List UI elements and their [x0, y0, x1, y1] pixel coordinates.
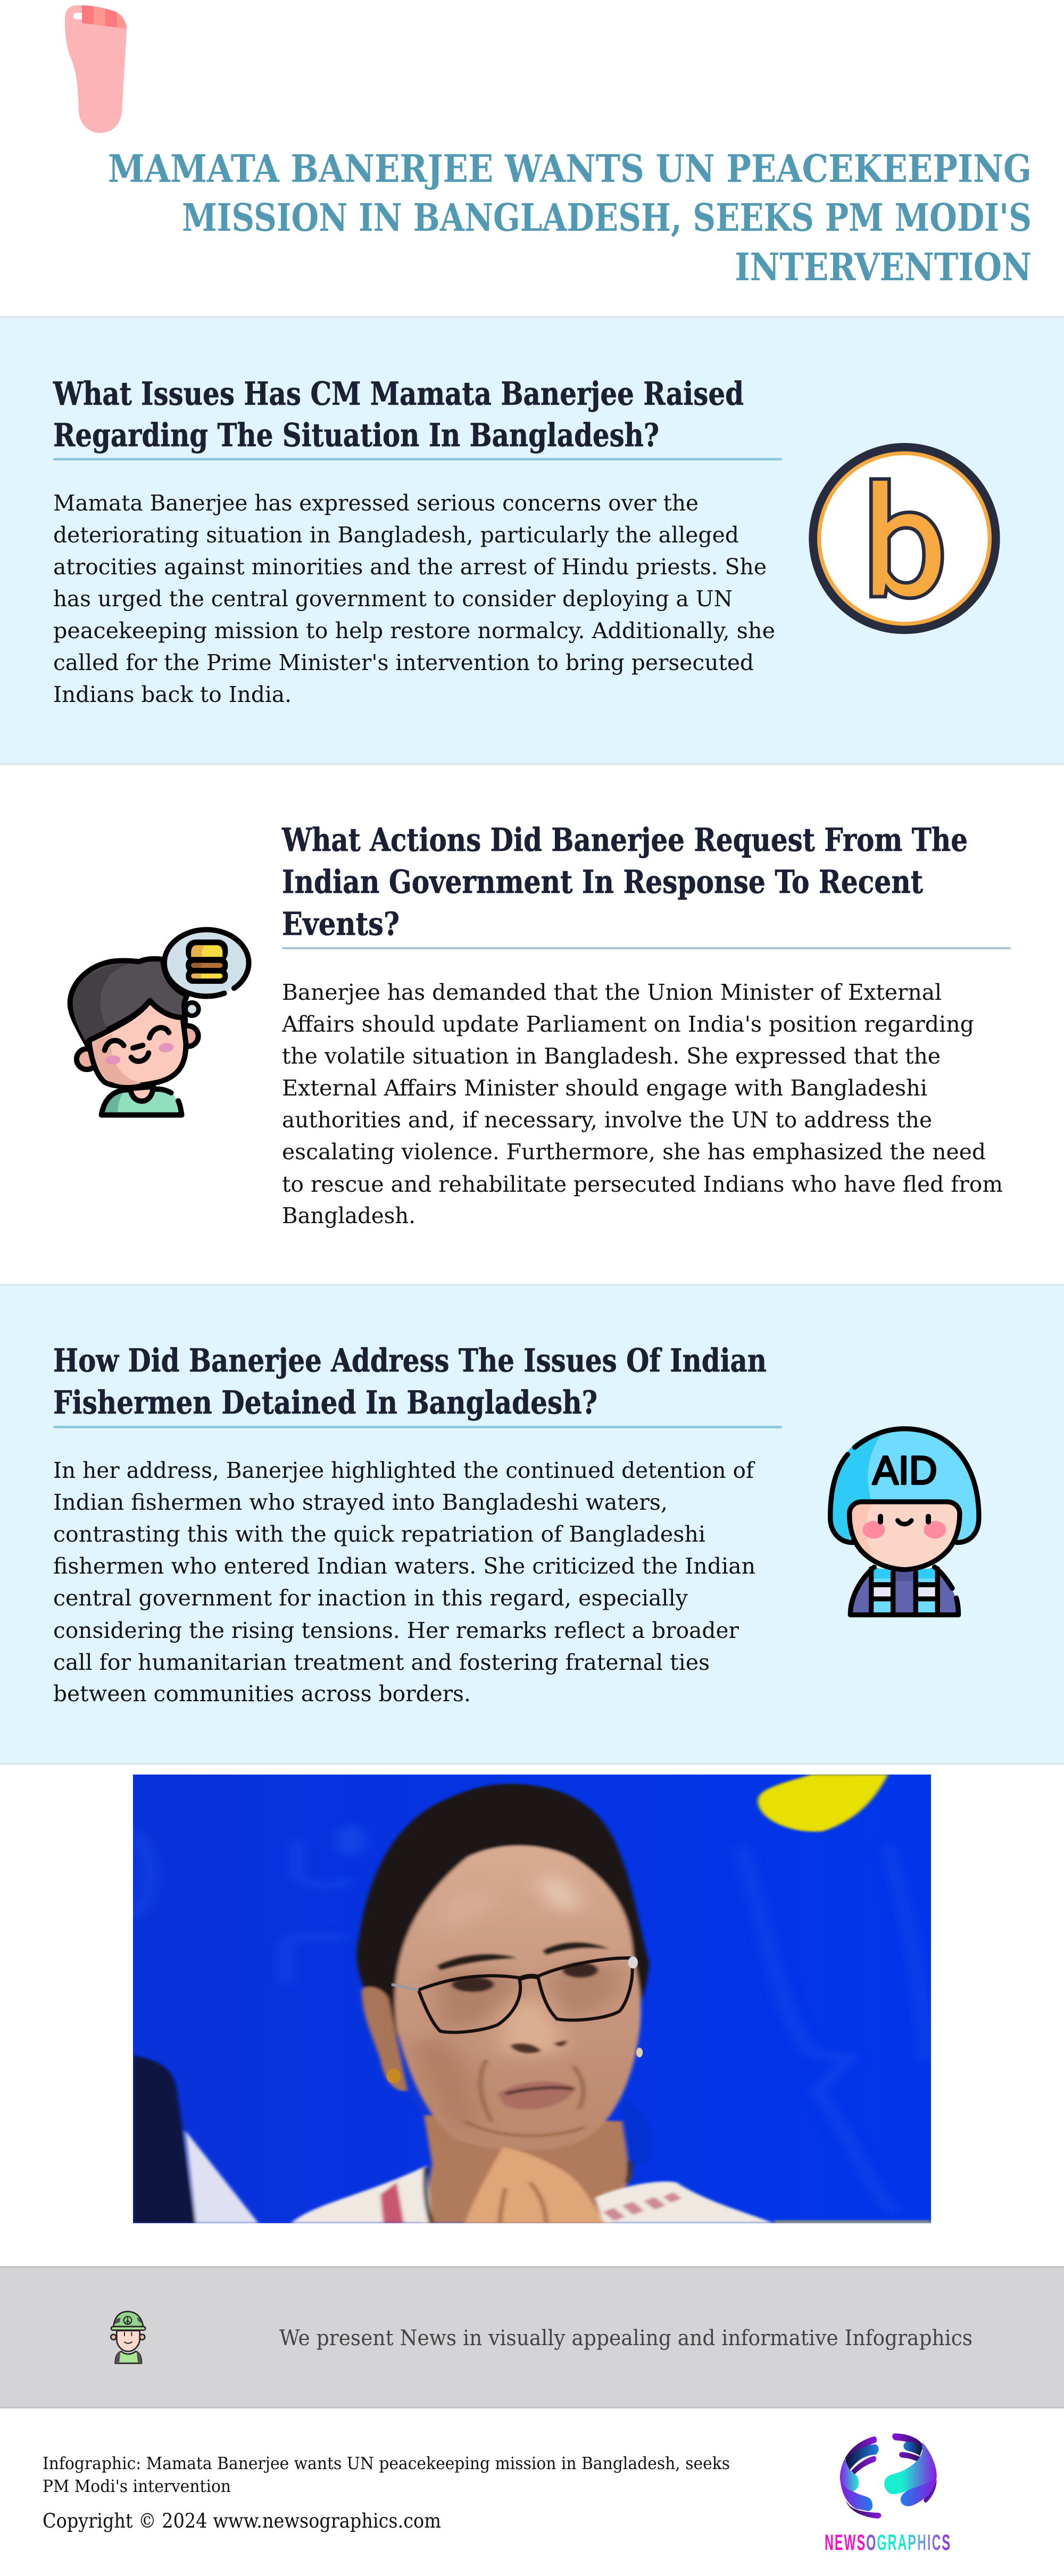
body text: issues raised: Mamata Banerjee has expressed serious concerns over the: [53, 490, 699, 516]
heading: issues raised: Regarding The Situation In Bangladesh?: [53, 417, 659, 454]
body text: fishermen detained: between communities across borders.: [53, 1681, 471, 1707]
heading: issues raised: [53, 375, 744, 454]
panel: actions requested: [70, 822, 1011, 1228]
icon: soldier with peace helmet: [111, 2312, 145, 2363]
heading: actions requested: Indian Government In Response To Recent: [282, 864, 923, 901]
panel: fishermen detained: [0, 1285, 1064, 1764]
heading: fishermen detained: How Did Banerjee Address The Issues Of Indian: [53, 1342, 767, 1379]
panel: tagline band: [0, 2267, 1064, 2407]
body text: actions requested: Affairs should update Parliament on India's position regarding: [281, 1011, 974, 1037]
body text: issues raised: called for the Prime Minister's intervention to bring persecuted: [53, 650, 754, 675]
heading: fishermen detained: Fishermen Detained In Bangladesh?: [53, 1384, 597, 1421]
icon: foot: [65, 0, 128, 133]
heading: issues raised: What Issues Has CM Mamata Banerjee Raised: [53, 375, 744, 413]
heading: fishermen detained: [53, 1342, 767, 1421]
body text: issues raised: atrocities against minorities and the arrest of Hindu priests. She: [53, 554, 767, 580]
body text: fishermen detained: call for humanitarian treatment and fostering fraternal ties: [53, 1650, 710, 1675]
heading: actions requested: [281, 822, 968, 943]
icon: letter b badge: [809, 443, 1000, 634]
body text: issues raised: Indians back to India.: [53, 682, 292, 707]
body text: actions requested: Bangladesh.: [282, 1203, 415, 1228]
body text: actions requested: escalating violence. Furthermore, she has emphasized the need: [282, 1139, 986, 1165]
body text: actions requested: authorities and, if necessary, involve the UN to address the: [282, 1107, 932, 1133]
credit text: [43, 2453, 730, 2532]
body text: fishermen detained: considering the rising tensions. Her remarks reflect a broader: [53, 1618, 739, 1643]
logo mark: [840, 2433, 937, 2519]
body text: actions requested: the volatile situation in Bangladesh. She expressed that the: [282, 1043, 941, 1069]
credit text: Infographic: Mamata Banerjee wants UN peacekeeping mission in Bangladesh, seeks: [43, 2453, 730, 2473]
body text: actions requested: [281, 980, 1003, 1228]
title: [108, 146, 1032, 289]
logo wordmark: NEWSOGRAPHICS: [825, 2530, 950, 2555]
body text: issues raised: has urged the central government to consider deploying a UN: [53, 586, 733, 612]
body text: fishermen detained: central government for inaction in this regard, especially: [53, 1585, 688, 1611]
heading: actions requested: Events?: [282, 906, 400, 943]
body text: fishermen detained: Indian fishermen who strayed into Bangladeshi waters,: [53, 1490, 668, 1515]
panel: issues raised: [0, 317, 1064, 764]
body text: fishermen detained: fishermen who entered Indian waters. She criticized the Indian: [53, 1553, 755, 1579]
credit text: Copyright © 2024 www.newsographics.com: [43, 2510, 441, 2532]
body text: issues raised: peacekeeping mission to help restore normalcy. Additionally, she: [53, 618, 775, 643]
body text: issues raised: deteriorating situation in Bangladesh, particularly the alleged: [53, 522, 739, 548]
icon: boy thinking of a burger: [70, 929, 249, 1115]
body text: fishermen detained: In her address, Banerjee highlighted the continued detention of: [53, 1458, 755, 1483]
credit text: PM Modi's intervention: [43, 2476, 231, 2496]
photo: Mamata Banerjee portrait: [133, 1775, 931, 2223]
body text: actions requested: to rescue and rehabilitate persecuted Indians who have fled from: [282, 1172, 1003, 1197]
icon: aid worker with helmet: [830, 1429, 979, 1615]
body text: issues raised: [53, 490, 775, 707]
body text: fishermen detained: [53, 1458, 755, 1707]
logo: Newsographics: [825, 2433, 950, 2555]
body text: fishermen detained: contrasting this with the quick repatriation of Bangladeshi: [53, 1521, 705, 1547]
body text: actions requested: Banerjee has demanded that the Union Minister of External: [282, 980, 942, 1005]
icon: aid worker with helmet: AID: [872, 1448, 937, 1493]
body text: actions requested: External Affairs Minister should engage with Bangladeshi: [282, 1075, 927, 1101]
tagline text: We present News in visually appealing and informative Infographics: [279, 2326, 972, 2351]
